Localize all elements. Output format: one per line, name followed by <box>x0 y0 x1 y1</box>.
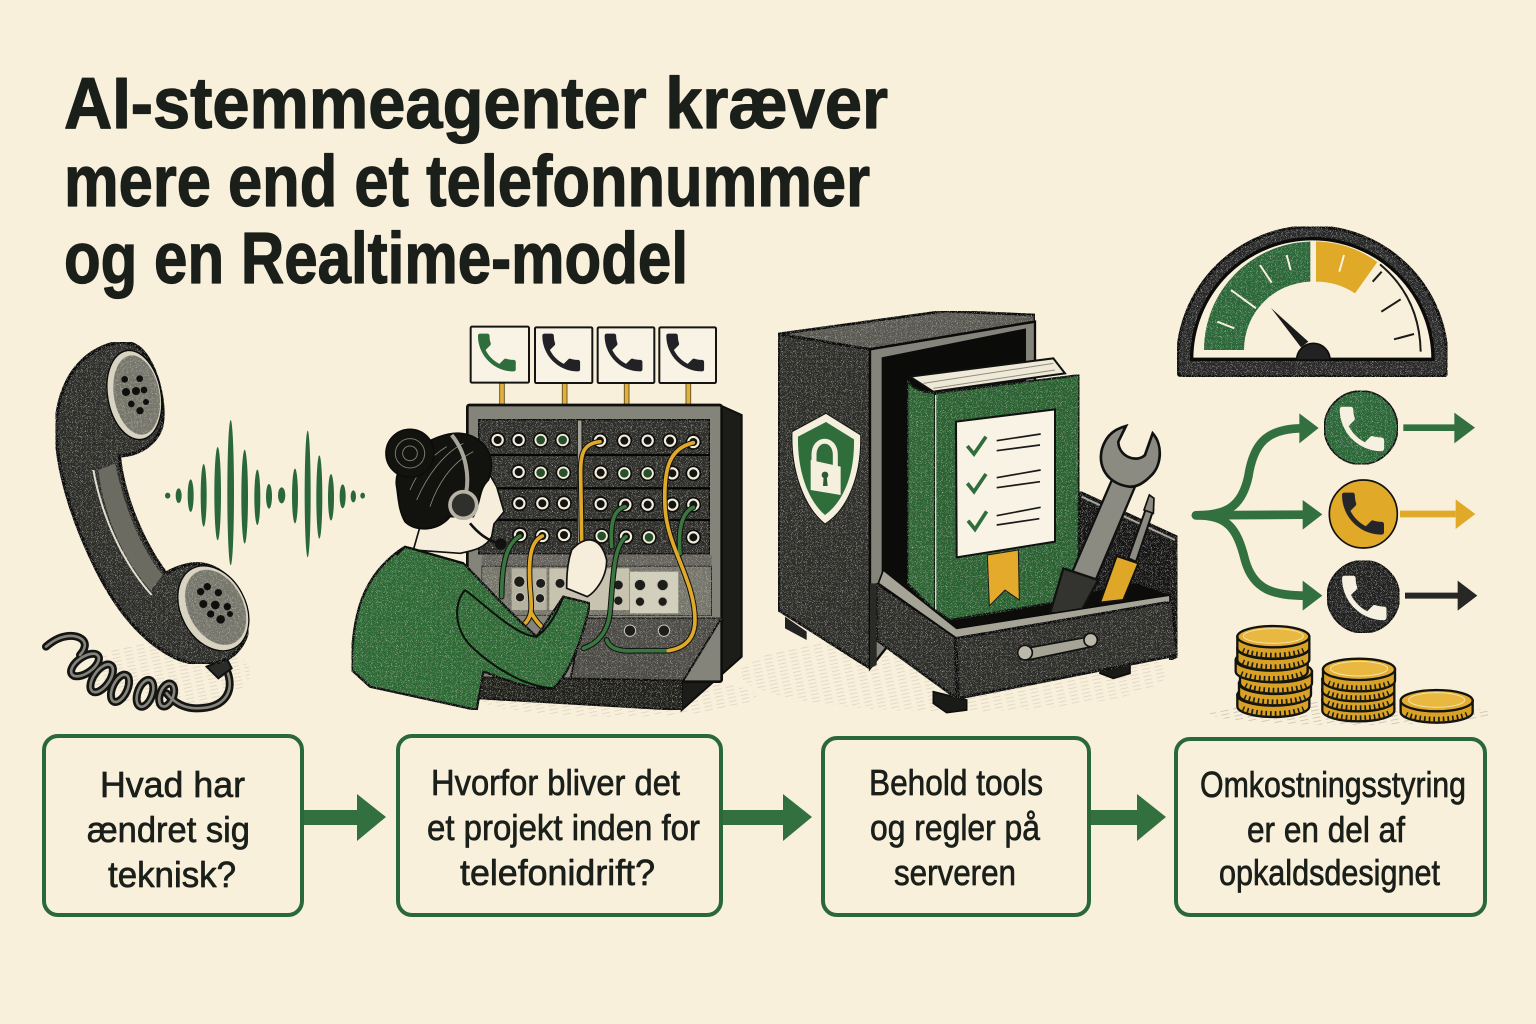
box 4: cost control: opkaldsdesignet <box>1219 852 1440 893</box>
call routing diagram <box>1196 391 1477 633</box>
box 2: telephony project: telefonidrift? <box>460 852 655 893</box>
box 1: what changed: teknisk? <box>108 854 236 895</box>
branching arrows <box>1196 413 1322 611</box>
cabinet <box>778 311 1035 668</box>
headset <box>450 435 506 550</box>
earpiece <box>100 346 168 444</box>
box 3: tools on server: og regler på <box>870 807 1041 848</box>
title: AI-stemmeagenter kræver <box>64 64 888 144</box>
illustration: cost gauge <box>1177 227 1447 377</box>
ground hatching <box>477 677 757 717</box>
box 3: tools on server <box>823 738 1089 915</box>
ground hatching <box>740 635 1167 712</box>
drawer handle <box>1018 633 1097 660</box>
operator <box>352 429 607 710</box>
green zone <box>1204 242 1310 350</box>
arrow 1 <box>304 794 386 841</box>
hair <box>396 433 491 529</box>
box 1: what changed: ændret sig <box>87 809 250 850</box>
illustration: telephone handset <box>46 342 263 709</box>
drawer back <box>1080 492 1177 660</box>
box 3: tools on server: Behold tools <box>869 762 1043 803</box>
tall stack <box>1236 626 1312 717</box>
sound wave <box>165 420 365 565</box>
arrow 3 <box>1091 794 1166 841</box>
amber zone <box>1316 241 1377 293</box>
ground hatching <box>90 640 250 707</box>
single coin <box>1401 690 1473 723</box>
drawer <box>877 570 1177 713</box>
dark call <box>1327 561 1477 633</box>
medium stack <box>1322 659 1395 721</box>
mouthpiece <box>164 553 263 663</box>
gauge ticks <box>1217 255 1344 328</box>
switchboard body <box>467 405 742 710</box>
coin stacks <box>1210 626 1490 725</box>
shield with lock <box>792 413 861 524</box>
screwdriver <box>1100 495 1154 603</box>
green call <box>1324 391 1475 464</box>
cabinet feet <box>785 617 807 640</box>
handset body <box>56 342 248 664</box>
arrow 2 <box>723 794 812 841</box>
title: mere end et telefonnummer <box>64 142 870 222</box>
box 2: telephony project: Hvorfor bliver det <box>431 762 680 803</box>
box 3: tools on server: serveren <box>894 852 1016 893</box>
amber call <box>1329 480 1475 548</box>
wrench <box>1050 426 1160 613</box>
box 2: telephony project <box>398 736 721 915</box>
jacket <box>352 547 590 710</box>
illustration: operator at switchboard <box>352 327 757 717</box>
title: og en Realtime-model <box>64 219 688 299</box>
coiled cord <box>46 636 230 709</box>
box 1: what changed <box>44 736 302 915</box>
call signs <box>471 327 716 405</box>
ground hatching <box>1210 702 1490 725</box>
book <box>907 358 1079 620</box>
box 1: what changed: Hvad har <box>100 764 245 805</box>
jacks <box>491 433 700 636</box>
patch cords <box>502 442 695 651</box>
illustration: cabinet with rulebook and tools <box>740 311 1177 713</box>
checklist label <box>956 409 1055 557</box>
hand <box>567 540 607 597</box>
needle <box>1271 308 1330 360</box>
title <box>64 64 888 299</box>
box 4: cost control <box>1176 739 1485 915</box>
hair bun <box>386 429 434 477</box>
box 4: cost control: Omkostningsstyring <box>1200 764 1466 805</box>
neck and face <box>413 463 504 553</box>
box 2: telephony project: et projekt inden for <box>427 807 700 848</box>
bookmark <box>987 550 1019 606</box>
box 4: cost control: er en del af <box>1247 809 1406 850</box>
